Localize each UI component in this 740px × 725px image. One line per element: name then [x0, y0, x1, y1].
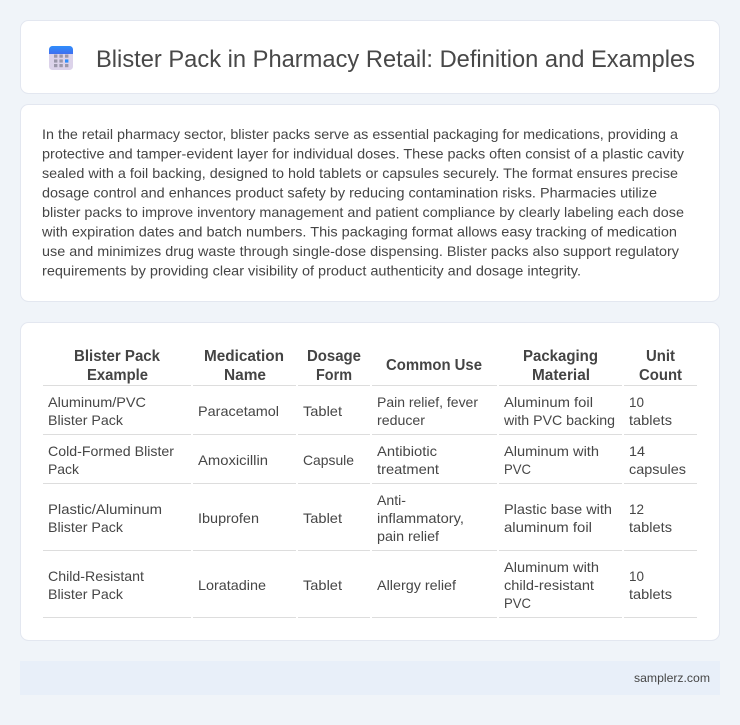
footer source text: samplerz.com — [634, 671, 710, 685]
icon: calendar grid — [49, 46, 73, 70]
text block: description paragraph: protective and tamper-evident layer for individual doses. These packs often consist of a plastic cavity — [42, 146, 684, 162]
table header row: Form — [316, 367, 352, 384]
table row: Cold-Formed: Cold-Formed Blister — [48, 443, 174, 459]
table row: Plastic/Aluminum: Blister Pack — [48, 519, 124, 535]
text block: description paragraph — [41, 126, 684, 278]
text block: description paragraph: In the retail pharmacy sector, blister packs serve as essential packaging for medications, providing a — [42, 126, 678, 142]
table header row: Packaging — [523, 348, 598, 365]
table row: Aluminum/PVC: Aluminum/PVC — [48, 394, 146, 410]
panel: description — [20, 104, 720, 302]
text block: description paragraph: use and minimizes drug waste through single-dose dispensing. Blister packs also support regulatory — [42, 243, 679, 259]
table row: Plastic/Aluminum: Ibuprofen — [198, 510, 259, 526]
table row: Child-Resistant: Allergy relief — [377, 577, 456, 593]
table row: Aluminum/PVC: Paracetamol — [198, 403, 279, 419]
table header row: Blister Pack — [74, 348, 160, 365]
table row: Aluminum/PVC: reducer — [377, 412, 425, 428]
table row: Cold-Formed: Antibiotic — [377, 443, 437, 459]
title: Blister Pack in Pharmacy Retail: Definition and Examples — [96, 46, 695, 73]
table header row: Dosage — [307, 348, 361, 365]
table header row: Count — [639, 367, 683, 384]
table row: Cold-Formed: Aluminum with — [504, 443, 599, 459]
table row: Plastic/Aluminum: 12 — [629, 501, 644, 517]
table row: Plastic/Aluminum: Tablet — [303, 510, 342, 526]
table header row: Material — [532, 367, 590, 384]
table row: Plastic/Aluminum: pain relief — [377, 528, 439, 544]
table row: Child-Resistant: child-resistant — [504, 577, 594, 593]
table row: Cold-Formed: Pack — [48, 461, 80, 477]
table row: Cold-Formed: PVC — [504, 461, 531, 477]
table row: Plastic/Aluminum: aluminum foil — [504, 519, 592, 535]
table header row: Common Use — [386, 357, 482, 374]
table header row — [74, 348, 683, 384]
table row: Aluminum/PVC: Tablet — [303, 403, 342, 419]
table row: Child-Resistant: tablets — [629, 586, 672, 602]
table header row: Medication — [204, 348, 284, 365]
table row: Plastic/Aluminum: inflammatory, — [377, 510, 464, 526]
table row: Child-Resistant: PVC — [504, 595, 531, 611]
table row: Plastic/Aluminum: Plastic base with — [504, 501, 612, 517]
panel: table card — [20, 322, 720, 640]
table row: Cold-Formed: capsules — [629, 461, 686, 477]
text block: description paragraph: with expiration dates and batch numbers. This packaging format allows easy tracking of medication — [41, 224, 677, 240]
table row: Cold-Formed: Capsule — [303, 452, 354, 468]
table row: Plastic/Aluminum: tablets — [629, 519, 672, 535]
table row: Aluminum/PVC: 10 — [629, 394, 644, 410]
panel: title header — [20, 20, 720, 94]
text block: description paragraph: blister packs to improve inventory management and patient compliance by clearly labeling each dose — [42, 204, 684, 220]
table row: Plastic/Aluminum — [48, 492, 672, 544]
table row: Cold-Formed — [48, 443, 686, 477]
text block: description paragraph: dosage control and enhances product safety by reducing contamination risks. Pharmacies utilize — [42, 184, 657, 200]
table header row: Name — [224, 367, 266, 384]
table header row: Unit — [646, 348, 676, 365]
footer bar — [20, 661, 720, 695]
table row: Aluminum/PVC: Pain relief, fever — [377, 394, 478, 410]
text block: description paragraph: sealed with a foil backing, designed to hold tablets or capsules securely. The format ensures precise — [42, 165, 678, 181]
table row: Plastic/Aluminum: Anti- — [377, 492, 406, 508]
table row: Aluminum/PVC: tablets — [629, 412, 672, 428]
table: blister pack examples — [43, 348, 697, 618]
table row: Child-Resistant: Aluminum with — [504, 559, 599, 575]
table header row: Example — [87, 367, 148, 384]
table row: Aluminum/PVC — [48, 394, 672, 428]
table row: Child-Resistant: 10 — [629, 568, 644, 584]
table row: Child-Resistant — [48, 559, 672, 611]
table row: Child-Resistant: Child-Resistant — [48, 568, 144, 584]
table row: Plastic/Aluminum: Plastic/Aluminum — [48, 501, 162, 517]
table row: Cold-Formed: 14 — [629, 443, 645, 459]
table row: Cold-Formed: Amoxicillin — [198, 452, 268, 468]
table row: Aluminum/PVC: Aluminum foil — [504, 394, 593, 410]
table row: Child-Resistant: Loratadine — [198, 577, 266, 593]
table row: Aluminum/PVC: Blister Pack — [48, 412, 124, 428]
text block: description paragraph: requirements by providing clear visibility of product authenticity and dosage integrity. — [42, 262, 581, 278]
table row: Child-Resistant: Tablet — [303, 577, 342, 593]
table row: Aluminum/PVC: with PVC backing — [503, 412, 615, 428]
table row: Child-Resistant: Blister Pack — [48, 586, 124, 602]
table row: Cold-Formed: treatment — [377, 461, 439, 477]
